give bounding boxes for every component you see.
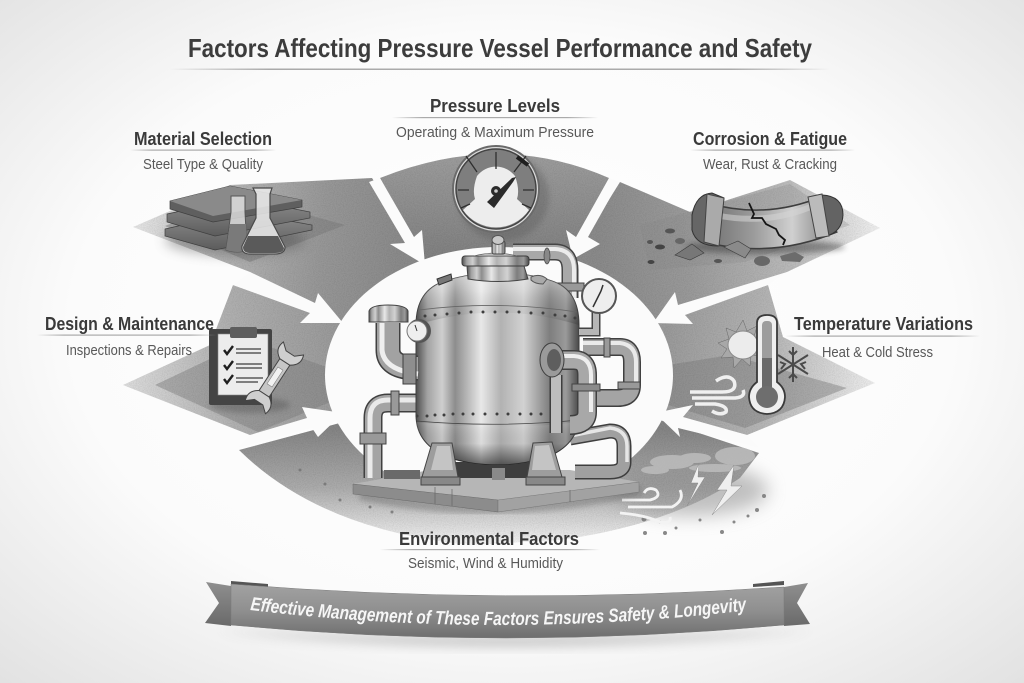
pipe: right front elbow [553, 356, 591, 425]
icon: pressure gauge [453, 146, 549, 241]
ground debris [298, 468, 766, 535]
gauge: small left [407, 319, 431, 343]
banner shadow [215, 630, 815, 645]
label: temperature variations: Heat & Cold Stress [822, 345, 933, 361]
label: corrosion and fatigue: Wear, Rust & Cracking [703, 157, 837, 173]
wedge: material selection [133, 178, 425, 330]
darker diamond behind weather [668, 355, 847, 428]
label: environmental factors: Seismic, Wind & Humidity [408, 556, 564, 572]
clipboard [209, 329, 272, 405]
wind [690, 377, 744, 414]
clouds [641, 447, 755, 474]
icon: pressure vessel [360, 236, 640, 485]
banner left tail [205, 582, 231, 626]
wedge: environmental factors [239, 420, 759, 545]
pipe: right lower loop [570, 428, 627, 472]
banner [205, 581, 810, 652]
wedge: temperature variations [650, 285, 875, 435]
label: design and maintenance: Design & Maintenance [45, 314, 214, 334]
top flange and knob [467, 266, 528, 282]
lightning bolts [687, 463, 705, 506]
label: pressure levels: Pressure Levels [430, 96, 560, 116]
arrow: right upper [653, 272, 787, 324]
title: Factors Affecting Pressure Vessel Performance and Safety [188, 33, 812, 63]
label: material selection: Steel Type & Quality [143, 157, 264, 173]
icon: clipboard and wrench [209, 327, 305, 414]
plate: top [170, 186, 302, 222]
arrow: right lower [655, 405, 760, 448]
wedge: corrosion and fatigue [570, 180, 880, 325]
darker diamond behind tools [155, 340, 335, 432]
icon: corroded cracked pipe [647, 193, 845, 266]
banner text: Effective Management of These Factors Ensures Safety & Longevity [250, 597, 746, 626]
label: environmental factors: Environmental Factors [399, 529, 579, 549]
vessel body [416, 273, 579, 465]
arrow: left upper [233, 272, 343, 323]
label: material selection [130, 129, 276, 173]
pipe: upper left elbow [382, 323, 418, 374]
label: temperature variations [785, 314, 980, 361]
snowflake [778, 347, 808, 382]
plate: middle [167, 198, 310, 236]
wind swirl [620, 489, 681, 522]
pipe body [704, 214, 830, 229]
panel: surrounding factor wedges [123, 154, 880, 545]
banner folds [231, 581, 784, 587]
icon: environmental clouds, wind and lightning [298, 447, 766, 535]
icon: stacked steel plates and flasks [165, 186, 312, 255]
banner right tail [784, 583, 810, 626]
plate: bottom [165, 212, 312, 250]
sun [718, 320, 766, 368]
flask: test cylinder [226, 196, 247, 252]
soft ground fade: bottom right [612, 464, 768, 516]
central white ellipse [325, 247, 673, 503]
pipe: right upper loop [583, 343, 636, 398]
grain [123, 154, 880, 545]
support legs [422, 443, 458, 477]
icon: concrete platform [353, 470, 640, 512]
arrow: top right [566, 178, 619, 259]
left collar [692, 193, 724, 246]
wedge: pressure levels [380, 154, 609, 262]
right collar [822, 195, 843, 236]
vessel support feet rear [455, 462, 541, 478]
darker diamond behind materials [165, 196, 345, 262]
label: pressure levels: Operating & Maximum Pressure [396, 125, 594, 141]
banner body [231, 584, 784, 638]
label: material selection: Material Selection [134, 129, 272, 149]
label: pressure levels [392, 96, 598, 141]
crack [749, 203, 785, 245]
label: corrosion and fatigue [690, 129, 855, 173]
icon: thermometer, sun, snowflake and wind [690, 315, 808, 414]
wrench [244, 341, 305, 414]
rivets [416, 310, 576, 418]
label: environmental factors [380, 529, 600, 572]
rubble [675, 244, 704, 260]
arrow: left lower [238, 407, 343, 448]
arrows [233, 178, 787, 448]
pipe: top right elbow [513, 249, 574, 298]
gauge: right with bracket [579, 312, 596, 332]
label: design and maintenance [37, 314, 217, 359]
thermometer [749, 315, 785, 414]
darker diamond behind pipe [640, 184, 850, 270]
label: temperature variations: Temperature Variations [794, 314, 973, 334]
pipe: lower left [370, 400, 418, 478]
wedge: design and maintenance [123, 285, 345, 435]
label: corrosion and fatigue: Corrosion & Fatigue [693, 129, 847, 149]
arrow: top left [369, 178, 425, 265]
flask: erlenmeyer [242, 188, 285, 254]
label: design and maintenance: Inspections & Repairs [66, 343, 192, 359]
